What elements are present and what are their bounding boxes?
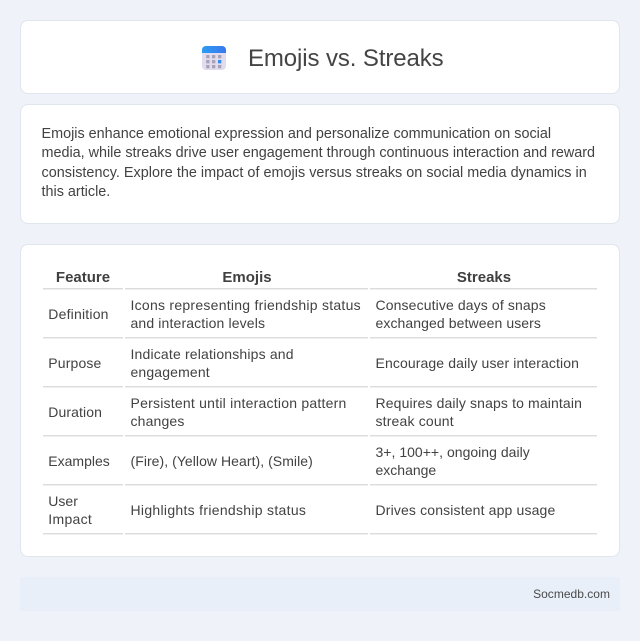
row: Purpose: Purpose [48, 355, 102, 371]
row: User Impact [48, 493, 555, 527]
panel: comparison table [20, 244, 620, 557]
row: Definition: Definition [48, 306, 109, 322]
table header row: Feature [56, 269, 110, 286]
text block: intro: media, while streaks drive user engagement through continuous interaction and reward [42, 145, 595, 161]
panel: title [20, 20, 620, 94]
row: Purpose: engagement [130, 364, 210, 380]
table header row: Emojis [222, 269, 272, 286]
row: Duration: changes [130, 413, 184, 429]
row: Duration: Persistent until interaction pattern [130, 395, 347, 411]
row: Duration: Requires daily snaps to maintain [376, 395, 582, 411]
row: Definition: and interaction levels [130, 315, 265, 331]
text block: intro: consistency. Explore the impact of emojis versus streaks on social media dynamics in [42, 165, 587, 181]
row: Definition: exchanged between users [376, 315, 541, 331]
row: Duration: Duration [48, 404, 102, 420]
row: Examples: exchange [376, 462, 436, 478]
row: User Impact: Highlights friendship status [130, 502, 306, 518]
table header row [56, 269, 511, 286]
row: Definition [48, 297, 546, 331]
row: Duration [48, 395, 582, 429]
panel: intro text [20, 104, 620, 224]
table header row: Streaks [457, 269, 511, 286]
text block: intro: Emojis enhance emotional expression and personalize communication on social [42, 126, 551, 142]
text block: intro [42, 126, 595, 200]
icon: calendar [202, 46, 226, 70]
row: Examples: 3+, 100++, ongoing daily [376, 444, 530, 460]
row: User Impact: Drives consistent app usage [376, 502, 555, 518]
footer bar [20, 577, 620, 611]
text block: intro: this article. [42, 184, 110, 200]
row: Purpose [48, 346, 579, 380]
row: Duration: streak count [376, 413, 454, 429]
row: Definition: Icons representing friendship status [130, 297, 361, 313]
row: Definition: Consecutive days of snaps [376, 297, 546, 313]
row: Examples: (Fire), (Yellow Heart), (Smile) [130, 453, 313, 469]
row: Purpose: Encourage daily user interaction [376, 355, 579, 371]
row: User Impact: Impact [48, 511, 92, 527]
row: Examples [48, 444, 530, 478]
heading: Emojis vs. Streaks [248, 45, 444, 72]
row: Examples: Examples [48, 453, 110, 469]
footer credit: Socmedb.com [533, 587, 610, 601]
row: User Impact: User [48, 493, 78, 509]
row: Purpose: Indicate relationships and [130, 346, 294, 362]
